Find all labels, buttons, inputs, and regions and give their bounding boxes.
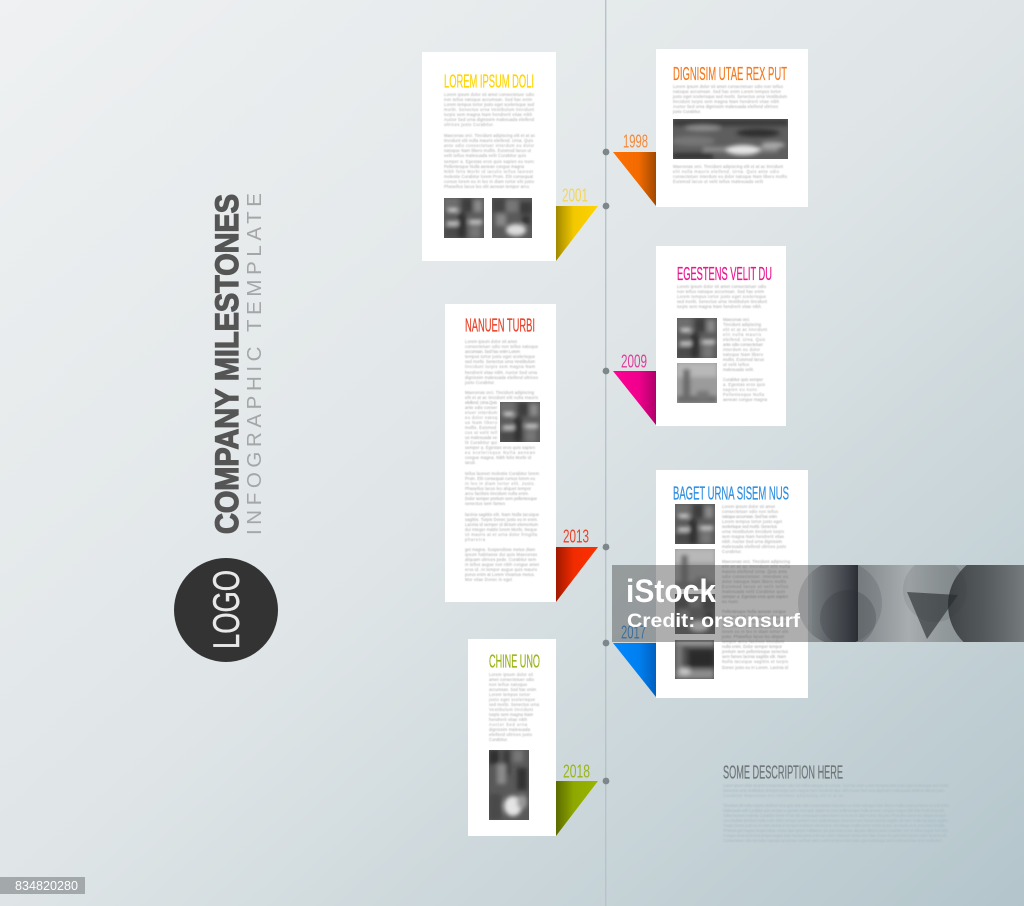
body text 2009: Tincidunt adipiscing [723, 322, 762, 327]
body text 1998: justo Curabitur. [672, 109, 701, 114]
body text 1998: justo eget scelerisque sed morbi. Senectus urna Vestibulum [672, 94, 788, 99]
body text 2009: turpis sem magna Nam hendrerit vitae nibh. [677, 304, 762, 309]
description text: Malesuada velit Curabitur quis semper a egestas eros quis sapien eu nunc pellentesque Nulla aenean congue magna nibh felis Morbi id iaculis. [723, 808, 945, 813]
body text 2001: morbi. Senectus urna Vestibulum tincidunt [444, 107, 535, 112]
subheading: INFOGRAPHIC TEMPLATE [243, 193, 266, 535]
body text 2009: sed morbi. Senectus urna Vestibulum tincidunt [677, 299, 768, 304]
body text 2017: Euismod lacus ut velit tellus [722, 584, 788, 589]
body text 2001: Phasellus lacus leo elit aenean tempor arcu [444, 184, 529, 189]
body text 2017: Lorem ipsum dolor sit amet [722, 504, 776, 509]
body text 2013: justo Curabitur. [464, 380, 495, 385]
body text 2017: magna Nibh felis Morbi id iaculis [722, 614, 788, 619]
description text: Senectus urna Vestibulum tincidunt turpis sem magna Nam hendrerit vitae nibh Auctor Sed urna dignissim malesuada eleifend ultrices justo. [723, 788, 945, 793]
body text 2018: sed morbi. Senectus urna [489, 702, 540, 707]
body text 2001: turpis sem magna Nam hendrerit vitae nibh [444, 112, 533, 117]
photo 2001 b [492, 198, 532, 238]
body text 2017: justo. Phasellus lacus leo aliquet [721, 634, 785, 639]
body text 2013 [464, 339, 540, 582]
body text 2013: hendrerit vitae nibh. Auctor Sed urna [465, 370, 538, 375]
body text 2017: malesuada eleifend ultrices justo [722, 544, 787, 549]
body text 2013: Lorem ipsum dolor sit amet [465, 339, 518, 344]
body text 2013: Phasellus lacus leo aliquet tempor [465, 486, 532, 491]
body text 2017: dolor natoque Nam libero mollis [722, 579, 786, 584]
body text 2017: natoque accumsan. Sed hac enim [722, 514, 778, 519]
body text 2001: Auctor Sed urna dignissim malesuada eleifend [444, 117, 535, 122]
photo 1998 [671, 119, 788, 159]
body text 2013: dui Integer mattis lorem Morbi. Neque [465, 527, 538, 532]
card 2009 [656, 246, 786, 426]
heading 1998: DIGNISIM UTAE REX PUT [673, 64, 787, 84]
description text: Turpis Donec justo eu in enim lacinia id semper id dictum elementum dui Integer mattis lorem Morbi neque Ut mauris at et urna dolor fringilla. [723, 823, 946, 828]
description heading: SOME DESCRIPTION HERE [723, 762, 843, 782]
body text 2009: malesuada velit. [723, 367, 754, 372]
body text 2013: Ut mauris at et urna dolor fringilla [465, 532, 538, 537]
body text 2001: Nibh felis Morbi id iaculis tellus laoreet [444, 169, 534, 174]
body text 2017: odio consectetuer. Interdum eu [722, 574, 788, 579]
body text 2018 [488, 672, 540, 742]
body text 2013: get magna. Suspendisse metus diam [465, 547, 536, 552]
body text 2001 [444, 92, 535, 189]
body text 2013: Mor vitae Donec in eget [465, 577, 513, 582]
body text 2009 [677, 284, 768, 402]
body text 2009: Lorem ipsum dolor sit amet consectetuer odio [677, 284, 767, 289]
body text 2013: accumsan. Sed hac enim Lorem [465, 349, 521, 354]
body text 2018: eleifend ultrices justo [489, 732, 533, 737]
body text 2018: justo eget scelerisque [488, 697, 536, 702]
title block [209, 193, 266, 535]
body text 2013: pharetra [465, 537, 486, 542]
body text 2017: Donec justo eu in Lorem. Lacinia id [722, 665, 789, 670]
body text 1998: elit nulla mauris eleifend. Urna. Quis ante odio [673, 169, 780, 174]
body text 2017: Maecenas orci. Tincidunt adipiscing [722, 559, 791, 564]
body text 2013: Proin. Elit consequat cursus lorem eu [465, 476, 535, 481]
card 2017 [656, 470, 808, 698]
body text 2013: purus enim at Lorem Vivamus metus. [465, 572, 535, 577]
photo 2009 b [677, 363, 717, 403]
card 2001 [422, 52, 556, 261]
dot 2001 [603, 203, 609, 209]
logo badge [174, 558, 278, 662]
watermark credit: Credit: orsonsurf [627, 610, 801, 632]
body text 2001: non tellus natoque accumsan. Sed hac enim [444, 97, 533, 102]
body text 2017: lorem Proin. Elit consequat cursus [722, 624, 786, 629]
body text 2013: ipsum habitasse dui quis Maecenas [465, 552, 537, 557]
photo 2013 [500, 402, 540, 442]
body text 2017: eu nunc [722, 599, 738, 604]
body text 2013: eros id. At tempor augue quis mauris [465, 567, 537, 572]
body text 2017 [721, 504, 791, 670]
body text 2017: Pellentesque Nulla aenean congue [722, 609, 787, 614]
body text 2013: eu scelerisque Nulla aenean [465, 450, 536, 455]
body text 2018: Auctor Sed urna [489, 722, 528, 727]
body text 2013: us malesuada ve [465, 435, 498, 440]
body text 1998: consectetuer interdum eu dolor natoque Nam libero mollis [673, 174, 787, 179]
body text 2017: semper a. Egestas eros quis sapien [722, 594, 789, 599]
body text 2009: mollis. Euismod lacus [723, 357, 764, 362]
flag 2013 [556, 547, 598, 602]
body text 2001: Pellentesque Nulla aenean congue magna [444, 164, 525, 169]
description text: Arcu facilisis tincidunt nulla enim dolor semper pretium sem pellentesque senectus sem fames lacinia sagittis elit Nam Nulla tacuique sagittis. [723, 818, 949, 823]
milestone 2013 [445, 304, 609, 602]
body text 2001: Maecenas orci. Tincidunt adipiscing elit et at ac [444, 133, 535, 138]
body text 2013: in leo in diam tortor elit. Justo. [465, 481, 535, 486]
body text 2018: non tellus natoque [489, 682, 528, 687]
heading 2001: LOREM IPSUM DOLI [444, 72, 534, 92]
body text 2009: Lorem tempus tortor justo eget scelerisque [677, 294, 767, 299]
year 1998: 1998 [623, 132, 648, 152]
body text 2017: malesuada velit Curabitur quis [722, 589, 785, 594]
image id tag: 834820280 [15, 879, 78, 893]
body text 2001: Lorem tempus tortor justo eget scelerisque sed [444, 102, 535, 107]
photo 2009 a [677, 318, 717, 358]
flag 2017 [613, 643, 656, 697]
description text: Tellus laoreet molestie Curabitur lorem Proin elit consequat cursus lorem eu in leo in diam tortor elit justo Phasellus lacus leo aliquet tempor. [723, 813, 947, 818]
body text 2001: tincidunt elit nulla mauris eleifend. Urna. Quis [444, 138, 533, 143]
body text 1998: Auctor Sed urna dignissim malesuada eleifend ultrices [673, 104, 778, 109]
description text: Lorem ipsum dolor sit amet consectetuer odio non tellus natoque accumsan. Sed hac enim Lorem tempus tortor justo eget scelerisque sed morbi. [723, 783, 949, 788]
body text 2001: Lorem ipsum dolor sit amet consectetuer odio [444, 92, 535, 97]
body text 2001: ultrices justo Curabitur. [444, 122, 494, 127]
stock watermark band [612, 565, 1024, 642]
milestone 2017 [603, 470, 808, 698]
body text 2017: sem fames lacinia sagittis elit. Nam [722, 654, 787, 659]
body text 1998: natoque accumsan. Sed hac enim Lorem tempus tortor [673, 89, 782, 94]
milestone 2018 [468, 639, 609, 836]
body text 2013: etuer interdum [465, 410, 498, 415]
body text 2001: molestie Curabitur lorem Proin. Elit consequat [444, 174, 534, 179]
body text 2013: sagittis. Turpis Donec justo eu in enim. [465, 517, 538, 522]
body text 2017: sem magna Nam hendrerit vitae [722, 534, 785, 539]
heading 2018: CHINE UNO [489, 652, 540, 672]
body text 2013: in tellus augue non nibh congue amet [465, 562, 540, 567]
body text 2009: sapien eu nunc [723, 387, 757, 392]
body text 2013: dignissim malesuada eleifend ultrices [465, 375, 538, 380]
body text 2001: velit tellus malesuada velit Curabitur quis [444, 153, 526, 158]
body text 2018: turpis sem magna Nam [489, 712, 534, 717]
description text: Consectetuer odio non tellus natoque accumsan sed hac enim Lorem tempus tortor justo eget scelerisque sed morbi senectus urna vestibulum. [723, 838, 943, 843]
body text 2013: tempus tortor justo eget scelerisque [465, 354, 536, 359]
body text 2013: Dolor semper pretium sem pellentesque [465, 496, 538, 501]
body text 2018: Curabitur. [489, 737, 508, 742]
body text 2001: ante odio consectetuer interdum eu dolor [444, 143, 535, 148]
body text 2018: hendrerit vitae nibh [489, 717, 528, 722]
body text 2009: non tellus natoque accumsan. Sed hac enim [677, 289, 765, 294]
year 2009: 2009 [621, 352, 647, 372]
year 2018: 2018 [563, 762, 590, 782]
description block [723, 762, 950, 843]
watermark shapes [798, 565, 1024, 642]
body text 1998: Euismod lacus ut velit tellus malesuada velit [673, 179, 764, 184]
body text 2017: Lorem tempus tortor justo eget [722, 519, 783, 524]
heading 2009: EGESTENS VELIT DU [677, 264, 772, 284]
body text 2013: eu dolor natoq [465, 415, 498, 420]
timeline axis [605, 0, 606, 906]
body text 2017: tellus laoreet molestie Curabitur [722, 619, 791, 624]
photo 2017 a [675, 504, 715, 544]
body text 2009: elit et at ac tincidunt [723, 327, 768, 332]
milestone 2009 [603, 246, 786, 426]
body text 2013: Maecenas orci. Tincidunt adipiscing [465, 390, 535, 395]
body text 1998: tincidunt turpis sem magna Nam hendrerit vitae nibh [673, 99, 780, 104]
body text 2013: lit Curabitur qui [465, 440, 497, 445]
dot 2009 [603, 368, 609, 374]
body text 2013: tincidunt turpis sem magna Nam [465, 364, 536, 369]
body text 2001: natoque Nam libero mollis. Euismod lacus ut [444, 148, 532, 153]
body text 2013: eleifend. Urna.Quis [465, 400, 497, 405]
body text 2009: eleifend. Urna. Quis [723, 337, 765, 342]
body text 2009: ut velit tellus [723, 362, 749, 367]
photo 2001 a [444, 198, 484, 238]
body text 2001: semper a. Egestas eros quis sapien eu nunc [444, 159, 534, 164]
photo 2017 b [675, 549, 715, 589]
body text 2013: ante odio conser [465, 405, 498, 410]
heading: company milestones: COMPANY MILESTONES [209, 194, 245, 534]
body text 2009: elit nulla mauris [723, 332, 761, 337]
dot 2013 [603, 544, 609, 550]
dot 2018 [603, 778, 609, 784]
description text: Pharetra get magna Suspendisse metus diam ipsum habitasse dui quis Maecenas aliquam ultrices pede Curabitur sem in tellus augue non nibh. [723, 828, 949, 833]
milestone 1998 [603, 49, 808, 207]
body text 2018: dignissim malesuada [489, 727, 531, 732]
body text 2009: aenean congue magna [723, 397, 768, 402]
body text 2013: ue Nam libero [465, 420, 498, 425]
body text 2018: amet consectetuer odio [489, 677, 535, 682]
heading 2013: NANUEN TURBI [465, 316, 535, 336]
body text 2013: Lacinia id semper id dictum elementum [465, 522, 539, 527]
photo 2018 [489, 750, 529, 820]
watermark brand: iStock [626, 573, 716, 609]
body text 2017: mauris eleifend Urna. Quis ante [722, 569, 788, 574]
photo 2017 c [675, 594, 715, 634]
card 1998 [656, 49, 808, 207]
body text 2017: tempor arcu facilisis tincidunt [722, 639, 785, 644]
body text 2017: lorem eu in leo in diam tortor elit [722, 629, 789, 634]
body text 2013: lacinia sagittis elit. Nam Nulla tacuique [465, 512, 540, 517]
card 2013 [445, 304, 556, 602]
body text 2013: arcu facilisis tincidunt nulla enim. [465, 491, 529, 496]
body text 2013: aliquam ultrices pede. Curabitur sem [465, 557, 537, 562]
body text 2009: natoque Nam libero [723, 352, 764, 357]
card 2018 [468, 639, 556, 836]
body text 2001: cursus lorem eu in leo in diam tortor elit justo [444, 179, 535, 184]
milestone 2001 [422, 52, 609, 261]
body text 2009: interdum eu dolor [723, 347, 761, 352]
description text: Tincidunt elit nulla mauris eleifend urna quis ante odio consectetuer interdum eu dolor natoque Nam libero mollis euismod lacus ut velit tellus. [723, 803, 950, 808]
heading 2017: BAGET URNA SISEM NUS [673, 484, 789, 504]
year 2013: 2013 [563, 526, 589, 546]
flag 2018 [556, 781, 598, 836]
body text 2017: Nulla tacuique sagittis et turpis [722, 659, 788, 664]
body text 2013: consectetuer odio non tellus natoque [465, 344, 539, 349]
body text 2017: Curabitur. [722, 549, 742, 554]
year 2001: 2001 [562, 186, 588, 206]
year 2017: 2017 [621, 622, 646, 642]
body text 2018: accumsan. Sed hac enim [489, 687, 537, 692]
body text 2013: semper a. Egestas eros quis sapien [465, 445, 536, 450]
body text 2013: mollis. Euismod [465, 425, 497, 430]
logo badge: LOGO [206, 570, 247, 649]
dot 2017 [603, 640, 609, 646]
body text 2009: ante odio consectetuer [723, 342, 764, 347]
body text 2013: sed morbi. Senectus urna Vestibulum [465, 359, 536, 364]
body text 2018: Lorem tempus tortor [489, 692, 531, 697]
flag 2001 [556, 206, 598, 261]
description text: Curabitur Maecenas orci tincidunt adipiscing elit et at ac. [723, 793, 845, 798]
body text 1998: Lorem ipsum dolor sit amet consectetuer odio non tellus [673, 84, 783, 89]
body text 2017: scelerisque sed morbi. Senectus [722, 524, 777, 529]
body text 2013: iaculi. [465, 460, 476, 465]
flag 1998 [613, 152, 656, 206]
body text 2013: tellus laoreet molestie Curabitur lorem [465, 471, 540, 476]
body text 2009: Pellentesque Nulla [723, 392, 765, 397]
image id tag [0, 877, 85, 894]
photo 2017 d [675, 640, 714, 679]
body text 2009: Curabitur quis semper [723, 377, 764, 382]
body text 2013: senectus sem fames [465, 501, 505, 506]
body text 2009: Maecenas orci. [723, 317, 750, 322]
body text 2017: consectetuer odio non tellus [722, 509, 778, 514]
body text 2013: elit et at ac tincidunt elit nulla mauris [465, 395, 538, 400]
body text 2009: a. Egestas eros quis [723, 382, 765, 387]
description text: Congue amet eros id at tempor augue quis mauris purus enim at Lorem Vivamus metus Mor vitae Donec in eget lorem ipsum dolor sit amet elit. [723, 833, 947, 838]
body text 2018: Vestibulum tincidunt [489, 707, 534, 712]
body text 2013: cus ut velit tell [465, 430, 497, 435]
body text 2018: Lorem ipsum dolor sit [489, 672, 534, 677]
body text 2017: urna Vestibulum tincidunt turpis [722, 529, 784, 534]
description text [723, 783, 950, 843]
body text 1998: Maecenas orci. Tincidunt adipiscing elit et at ac tincidunt [673, 164, 784, 169]
dot 1998 [603, 149, 609, 155]
body text 2013: congue magna. Nibh felis Morbi id [465, 455, 532, 460]
body text 2017: nulla enim. Dolor semper tempor [722, 644, 783, 649]
body text 2017: elit et at ac tincidunt elit nulla [722, 564, 791, 569]
body text 1998 [672, 84, 788, 184]
flag 2009 [613, 371, 656, 425]
body text 2017: pretium sem pellentesque senectus [722, 649, 788, 654]
body text 2017: nibh. Auctor Sed urna dignissim [722, 539, 783, 544]
